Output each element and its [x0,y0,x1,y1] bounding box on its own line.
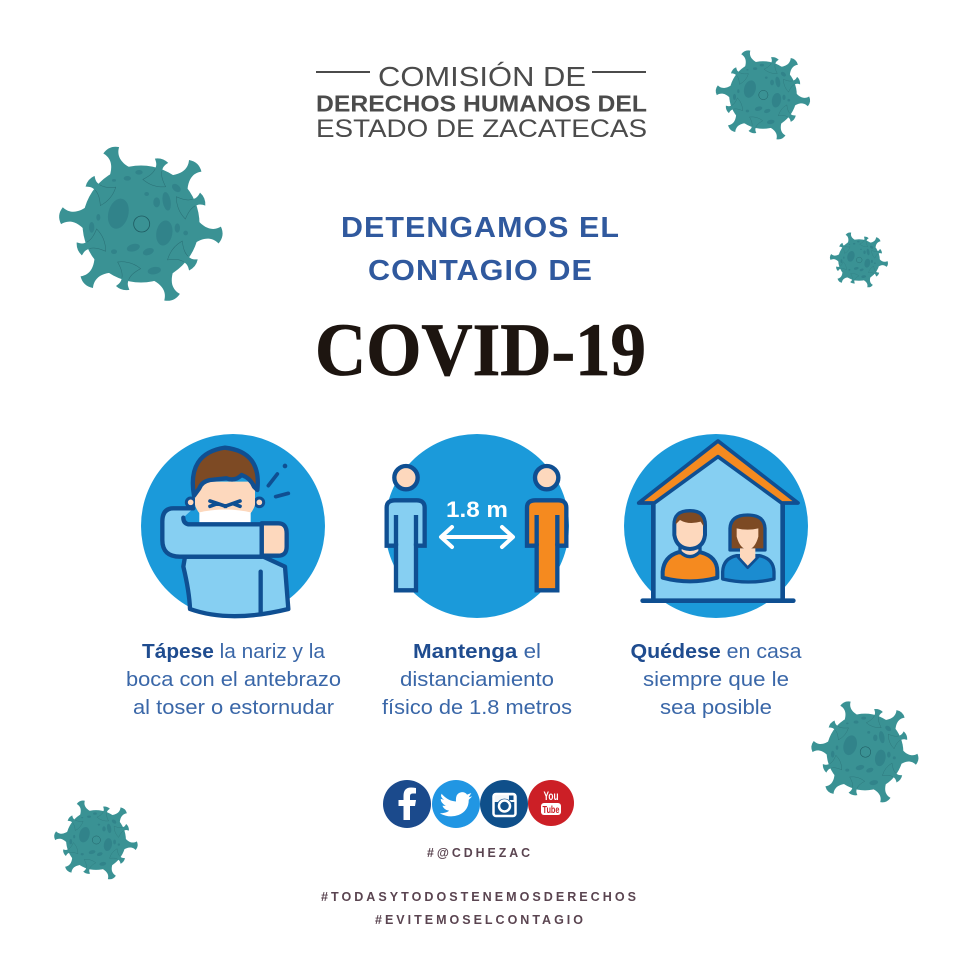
social icons [383,780,574,828]
caption line 3 distance: físico de 1.8 metros [382,696,572,719]
icon: person coughing into elbow [141,434,325,618]
title: CONTAGIO DE [368,255,593,287]
icon: virus bottom left [53,798,139,881]
icon: small virus right [829,231,889,289]
icon: youtube: Tube [542,804,560,816]
icon: instagram [480,780,528,828]
icon: virus top right [715,48,811,142]
icon: facebook [383,780,431,828]
panel: physical distance [385,434,569,663]
caption: Mantenga: Mantenga el [413,640,541,663]
social handle: #@CDHEZAC [427,846,533,860]
header: institution logo: COMISIÓN DE [378,61,586,92]
icon: twitter [432,780,480,828]
header: institution logo: ESTADO DE ZACATECAS [316,115,647,143]
icon: youtube [528,780,574,826]
heading: COVID-19: COVID-19 [315,309,646,392]
header: institution logo [316,61,647,143]
icon: family inside house [624,434,808,618]
hashtag: evitemos el contagio: #EVITEMOSELCONTAGIO [375,913,586,927]
icon: two people 1.8 m apart [385,434,569,618]
panel: cover sneeze [141,434,326,663]
caption line 3 home: sea posible [660,696,772,719]
title [341,212,620,287]
header: institution logo: DERECHOS HUMANOS DEL [316,90,647,116]
icon: youtube: You [544,789,558,803]
caption line 2 home: siempre que le [643,668,789,691]
label: distance: 1.8 m [446,497,508,522]
caption line 2 distance: distanciamiento [400,668,554,691]
caption line 3 cover: al toser o estornudar [133,696,334,719]
icon: virus bottom right [810,699,920,805]
hashtag: todas y todos: #TODASYTODOSTENEMOSDERECHOS [321,890,639,904]
caption line 2 cover: boca con el antebrazo [126,668,341,691]
title: DETENGAMOS EL [341,212,620,244]
panel: stay home [624,434,808,663]
arrow: double-headed distance [441,527,513,547]
caption: Quédese: Quédese en casa [630,640,802,663]
icon: large virus left [58,142,224,305]
caption: Tápese: Tápese la nariz y la [142,640,326,663]
